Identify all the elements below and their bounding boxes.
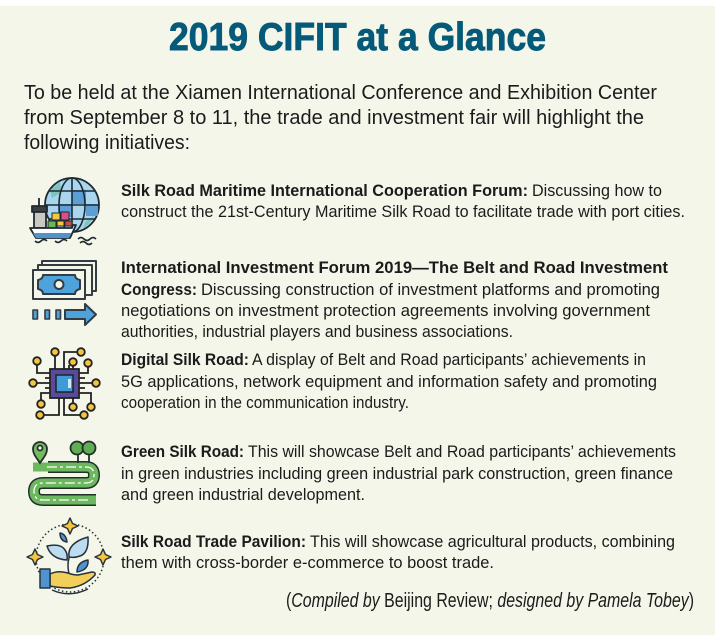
item 3 text <box>121 351 657 412</box>
item 2 text <box>121 259 668 341</box>
intro text block <box>24 82 657 154</box>
item 2 text: Congress: <box>121 281 197 299</box>
item 4 text <box>121 443 676 504</box>
item 3 text: Digital Silk Road: <box>121 351 249 369</box>
item 4 text: and green industrial development. <box>121 486 365 504</box>
item 4 text: Green Silk Road: <box>121 443 244 461</box>
intro text block: following initiatives: <box>24 132 190 154</box>
item 2 text: International Investment Forum 2019—The Belt and Road Investment <box>121 259 668 277</box>
item 4 text: in green industries including green industrial park construction, green finance <box>121 465 673 483</box>
item 5 text: them with cross-border e-commerce to boost trade. <box>121 554 494 572</box>
icon: ship and globe <box>30 178 99 244</box>
item 1 text: construct the 21st-Century Maritime Silk Road to facilitate trade with port cities. <box>121 203 685 221</box>
item 1 text: Silk Road Maritime International Cooperation Forum: <box>121 182 528 200</box>
item 5 text <box>121 533 675 572</box>
intro text block: To be held at the Xiamen International Conference and Exhibition Center <box>24 82 657 104</box>
title: 2019 CIFIT at a Glance <box>169 16 546 59</box>
item 2 text: Discussing construction of investment platforms and promoting <box>201 281 660 299</box>
item 3 text: 5G applications, network equipment and information safety and promoting <box>121 373 657 391</box>
item 3 text: A display of Belt and Road participants’ achievements in <box>252 351 646 369</box>
icon: microchip <box>29 348 100 419</box>
item 5 text: Silk Road Trade Pavilion: <box>121 533 306 551</box>
intro text block: from September 8 to 11, the trade and investment fair will highlight the <box>24 107 644 129</box>
item 1 text <box>121 182 685 221</box>
item 2 text: negotiations on investment protection agreements involving government <box>121 302 650 320</box>
item 1 text: Discussing how to <box>532 182 662 200</box>
item 4 text: This will showcase Belt and Road participants’ achievements <box>248 443 676 461</box>
icon: hand holding plant <box>27 518 111 594</box>
item 3 text: cooperation in the communication industry. <box>121 394 409 412</box>
item 2 text: authorities, industrial players and business associations. <box>121 323 513 341</box>
item 5 text: This will showcase agricultural products, combining <box>310 533 675 551</box>
icon: green road with pin and trees <box>33 442 96 500</box>
icon: banknotes and arrow <box>33 261 96 325</box>
